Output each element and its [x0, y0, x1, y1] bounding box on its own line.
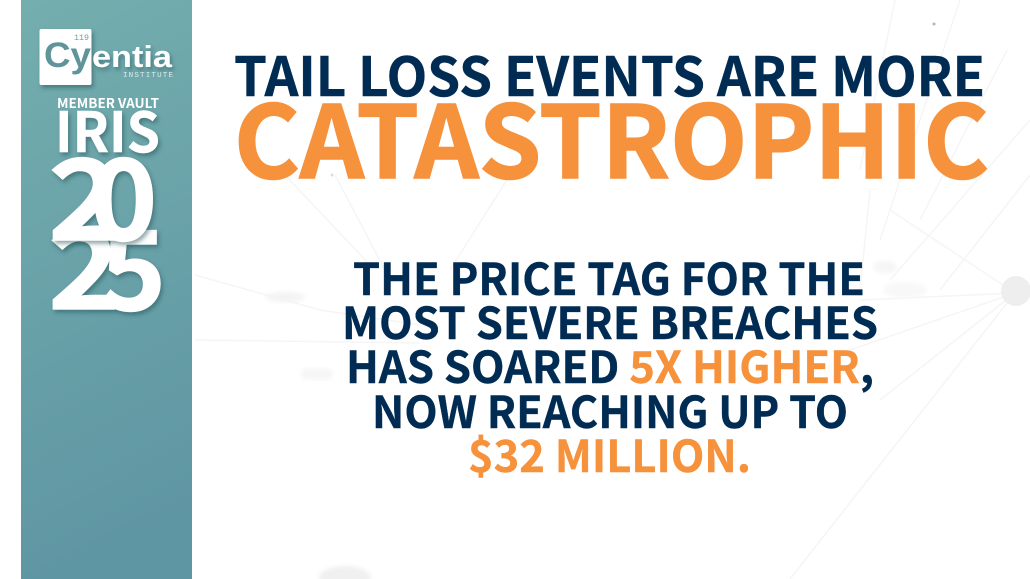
body text: $32 MILLION. — [468, 421, 751, 485]
body text: NOW REACHING UP TO — [372, 377, 848, 441]
label: IRIS: IRIS — [55, 88, 160, 168]
logo: Cyentia Institute: entia — [92, 39, 173, 74]
logo: Cyentia Institute — [40, 29, 173, 85]
year: 25: 5 — [100, 182, 166, 342]
label: member vault: MEMBER VAULT — [57, 92, 160, 112]
year: 20 — [48, 110, 157, 273]
logo: Cyentia Institute: 119 — [74, 34, 89, 43]
body text: HAS SOARED 5X HIGHER, — [346, 332, 874, 396]
year: 25: 2 — [48, 182, 121, 341]
body text: MOST SEVERE BREACHES — [342, 288, 878, 352]
logo: Cyentia Institute: Cy — [44, 36, 92, 75]
year: 25 — [48, 182, 166, 342]
year: 20: 0 — [90, 110, 157, 273]
logo: Cyentia Institute: INSTITUTE — [123, 72, 173, 80]
year: 20: 2 — [48, 111, 122, 273]
body text: THE PRICE TAG FOR THE — [353, 244, 865, 308]
title line 1: TAIL LOSS EVENTS ARE MORE — [234, 33, 985, 112]
sidebar panel — [21, 0, 192, 579]
title line 2: CATASTROPHIC — [234, 62, 989, 207]
body text — [342, 244, 878, 485]
